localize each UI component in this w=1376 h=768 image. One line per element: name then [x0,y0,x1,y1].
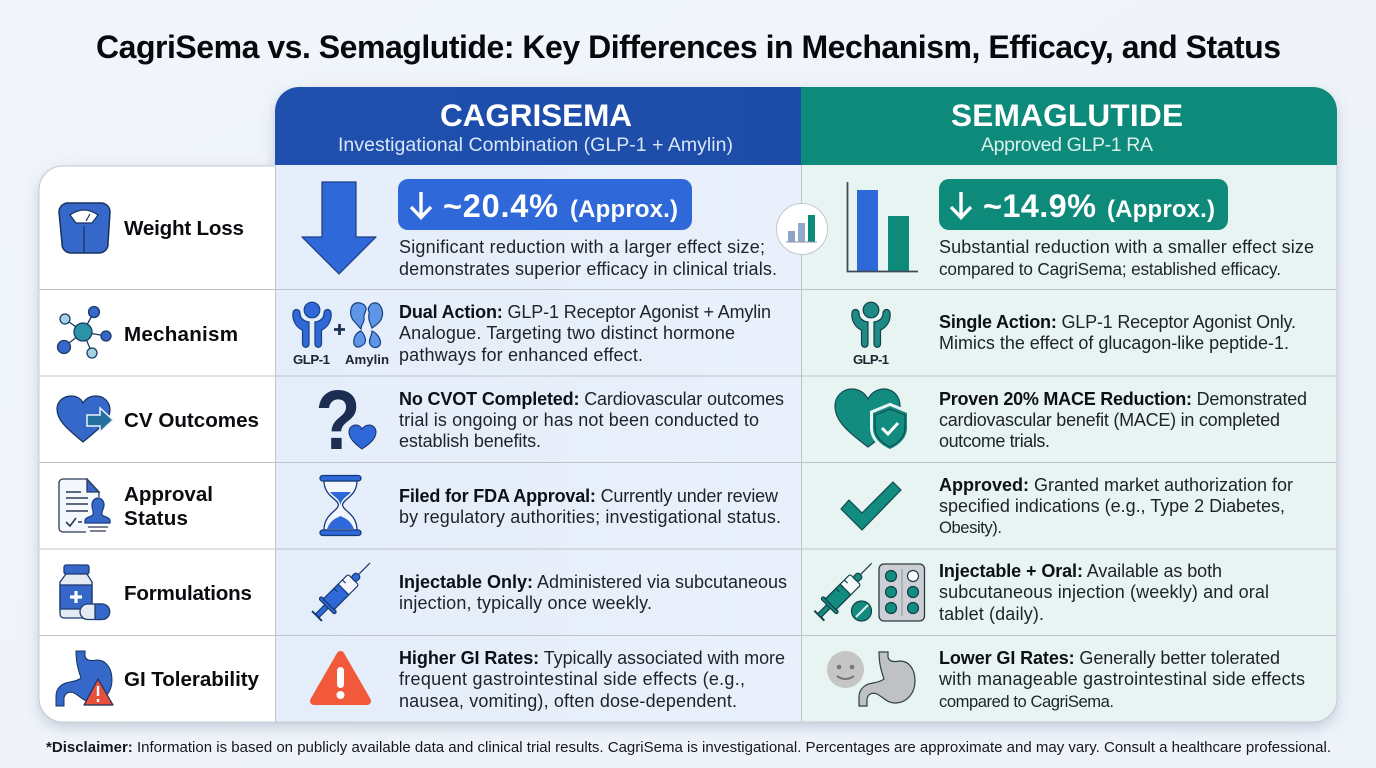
header: CagriSema: CAGRISEMA [440,97,632,133]
badge: 20.4%: ~20.4% [443,188,558,224]
Semaglutide: weight loss [848,179,1314,279]
text: pathways for enhanced effect. [399,345,643,365]
row: formulations label [60,565,252,620]
icon: stomach with warning [56,651,113,706]
header: Semaglutide [801,87,1337,165]
header: Semaglutide: SEMAGLUTIDE [951,97,1183,133]
text: outcome trials. [939,431,1050,451]
text: Mimics the effect of glucagon-like peptide-1. [939,333,1289,353]
text [939,237,1314,279]
text: compared to CagriSema; established efficacy. [939,259,1281,279]
Semaglutide: CV outcomes [835,389,1307,451]
CagriSema: approval [320,476,781,536]
row: GI tolerability label: GI Tolerability [124,668,260,691]
CagriSema: CV outcomes [315,373,784,467]
row: GI tolerability label [56,651,260,706]
text: Analogue. Targeting two distinct hormone [399,323,735,343]
row: CV outcomes label: CV Outcomes [124,409,259,432]
icon: heart with arrow [57,396,113,442]
row: approval status label [59,479,213,532]
text: Proven 20% MACE Reduction: Demonstrated [939,389,1307,409]
text: injection, typically once weekly. [399,593,652,613]
CagriSema: mechanism [293,302,771,367]
text [399,486,781,527]
row: mechanism label: Mechanism [124,323,238,346]
text [939,561,1269,624]
header: CagriSema: Investigational Combination (GLP-1 + Amylin) [338,134,733,156]
icon: large down arrow [302,182,376,274]
header: CagriSema [275,87,801,165]
icon: GLP-1 receptor and amylin [293,302,383,348]
text [399,389,784,451]
icon: molecule network [58,306,111,358]
text: Filed for FDA Approval: Currently under review [399,486,779,506]
icon: document and stamp [59,479,110,532]
Semaglutide: GI tolerability [827,648,1305,711]
badge: 14.9%: ~14.9% [983,188,1096,224]
CagriSema: weight loss [302,179,777,279]
row: formulations label: Formulations [124,582,252,605]
Semaglutide: mechanism [852,302,1296,367]
icon: syringe, pill and blister pack [812,556,924,623]
text: with manageable gastrointestinal side effects [938,669,1305,689]
text: Obesity). [939,518,1002,537]
plus sign [334,324,345,335]
row: approval status label: Status [124,507,188,530]
CagriSema: formulations [309,555,787,624]
text: tablet (daily). [939,604,1044,624]
text: No CVOT Completed: Cardiovascular outcomes [399,389,784,409]
text: frequent gastrointestinal side effects (e.g., [399,669,745,689]
icon: bottle and pill [60,565,110,620]
header: Semaglutide: Approved GLP-1 RA [981,134,1153,156]
text: Higher GI Rates: Typically associated with more [399,648,785,668]
text: Injectable Only: Administered via subcutaneous [399,572,787,592]
icon: syringe [309,555,378,624]
Semaglutide: mechanism: GLP-1 [853,352,889,367]
badge: 20.4%: (Approx.) [570,196,678,223]
text [939,389,1307,451]
row: CV outcomes label [57,396,259,442]
text: by regulatory authorities; investigational status. [399,507,781,527]
text [939,475,1293,537]
CagriSema: mechanism: GLP-1 [293,352,330,367]
text: Significant reduction with a larger effect size; [399,237,765,257]
text: Lower GI Rates: Generally better tolerated [939,648,1280,668]
text [399,648,785,711]
icon: question mark and heart: ? [315,373,361,467]
text: Dual Action: GLP-1 Receptor Agonist + Amylin [399,302,771,322]
text: Single Action: GLP-1 Receptor Agonist Only. [939,312,1296,332]
text [399,302,771,365]
text: subcutaneous injection (weekly) and oral [939,582,1269,602]
text: trial is ongoing or has not been conducted to [399,410,759,430]
text [938,648,1305,711]
text: compared to CagriSema. [939,692,1114,711]
badge: 14.9% [939,179,1228,230]
text: Injectable + Oral: Available as both [939,561,1222,581]
disclaimer: *Disclaimer: Information is based on publicly available data and clinical trial results. CagriSema is investigational. Percentages are approximate and may vary. Consult a healthcare professional. [46,739,1331,756]
icon: warning triangle [314,655,367,701]
badge: 14.9%: (Approx.) [1107,196,1215,223]
icon: comparison bar chart badge [776,204,828,254]
CagriSema: GI tolerability [314,648,785,711]
icon: check mark [841,482,901,530]
icon: scale [59,203,110,253]
text [939,312,1296,353]
Semaglutide: formulations [812,556,1269,624]
row: weight loss label: Weight Loss [124,217,244,240]
text: nausea, vomiting), often dose-dependent. [399,691,737,711]
icon: hourglass [320,476,361,536]
icon: bar chart [848,182,918,272]
icon: GLP-1 receptor [852,302,890,347]
row: weight loss label [59,203,244,253]
row: approval status label: Approval [124,483,213,506]
Semaglutide: approval [841,475,1293,537]
icon: heart and shield [835,389,907,449]
text: establish benefits. [399,431,541,451]
icon: smiley and stomach [827,651,915,706]
comparison table [39,87,1337,722]
text: specified indications (e.g., Type 2 Diabetes, [939,496,1285,516]
title: CagriSema vs. Semaglutide: Key Differences in Mechanism, Efficacy, and Status [96,29,1281,65]
text: Substantial reduction with a smaller effect size [939,237,1314,257]
badge: 20.4% [398,179,692,230]
row: mechanism label [58,306,238,358]
text [399,237,777,279]
text: demonstrates superior efficacy in clinical trials. [399,259,777,279]
text: cardiovascular benefit (MACE) in completed [939,410,1280,430]
text [399,572,787,613]
CagriSema: mechanism: Amylin [345,352,389,367]
text: Approved: Granted market authorization for [939,475,1293,495]
